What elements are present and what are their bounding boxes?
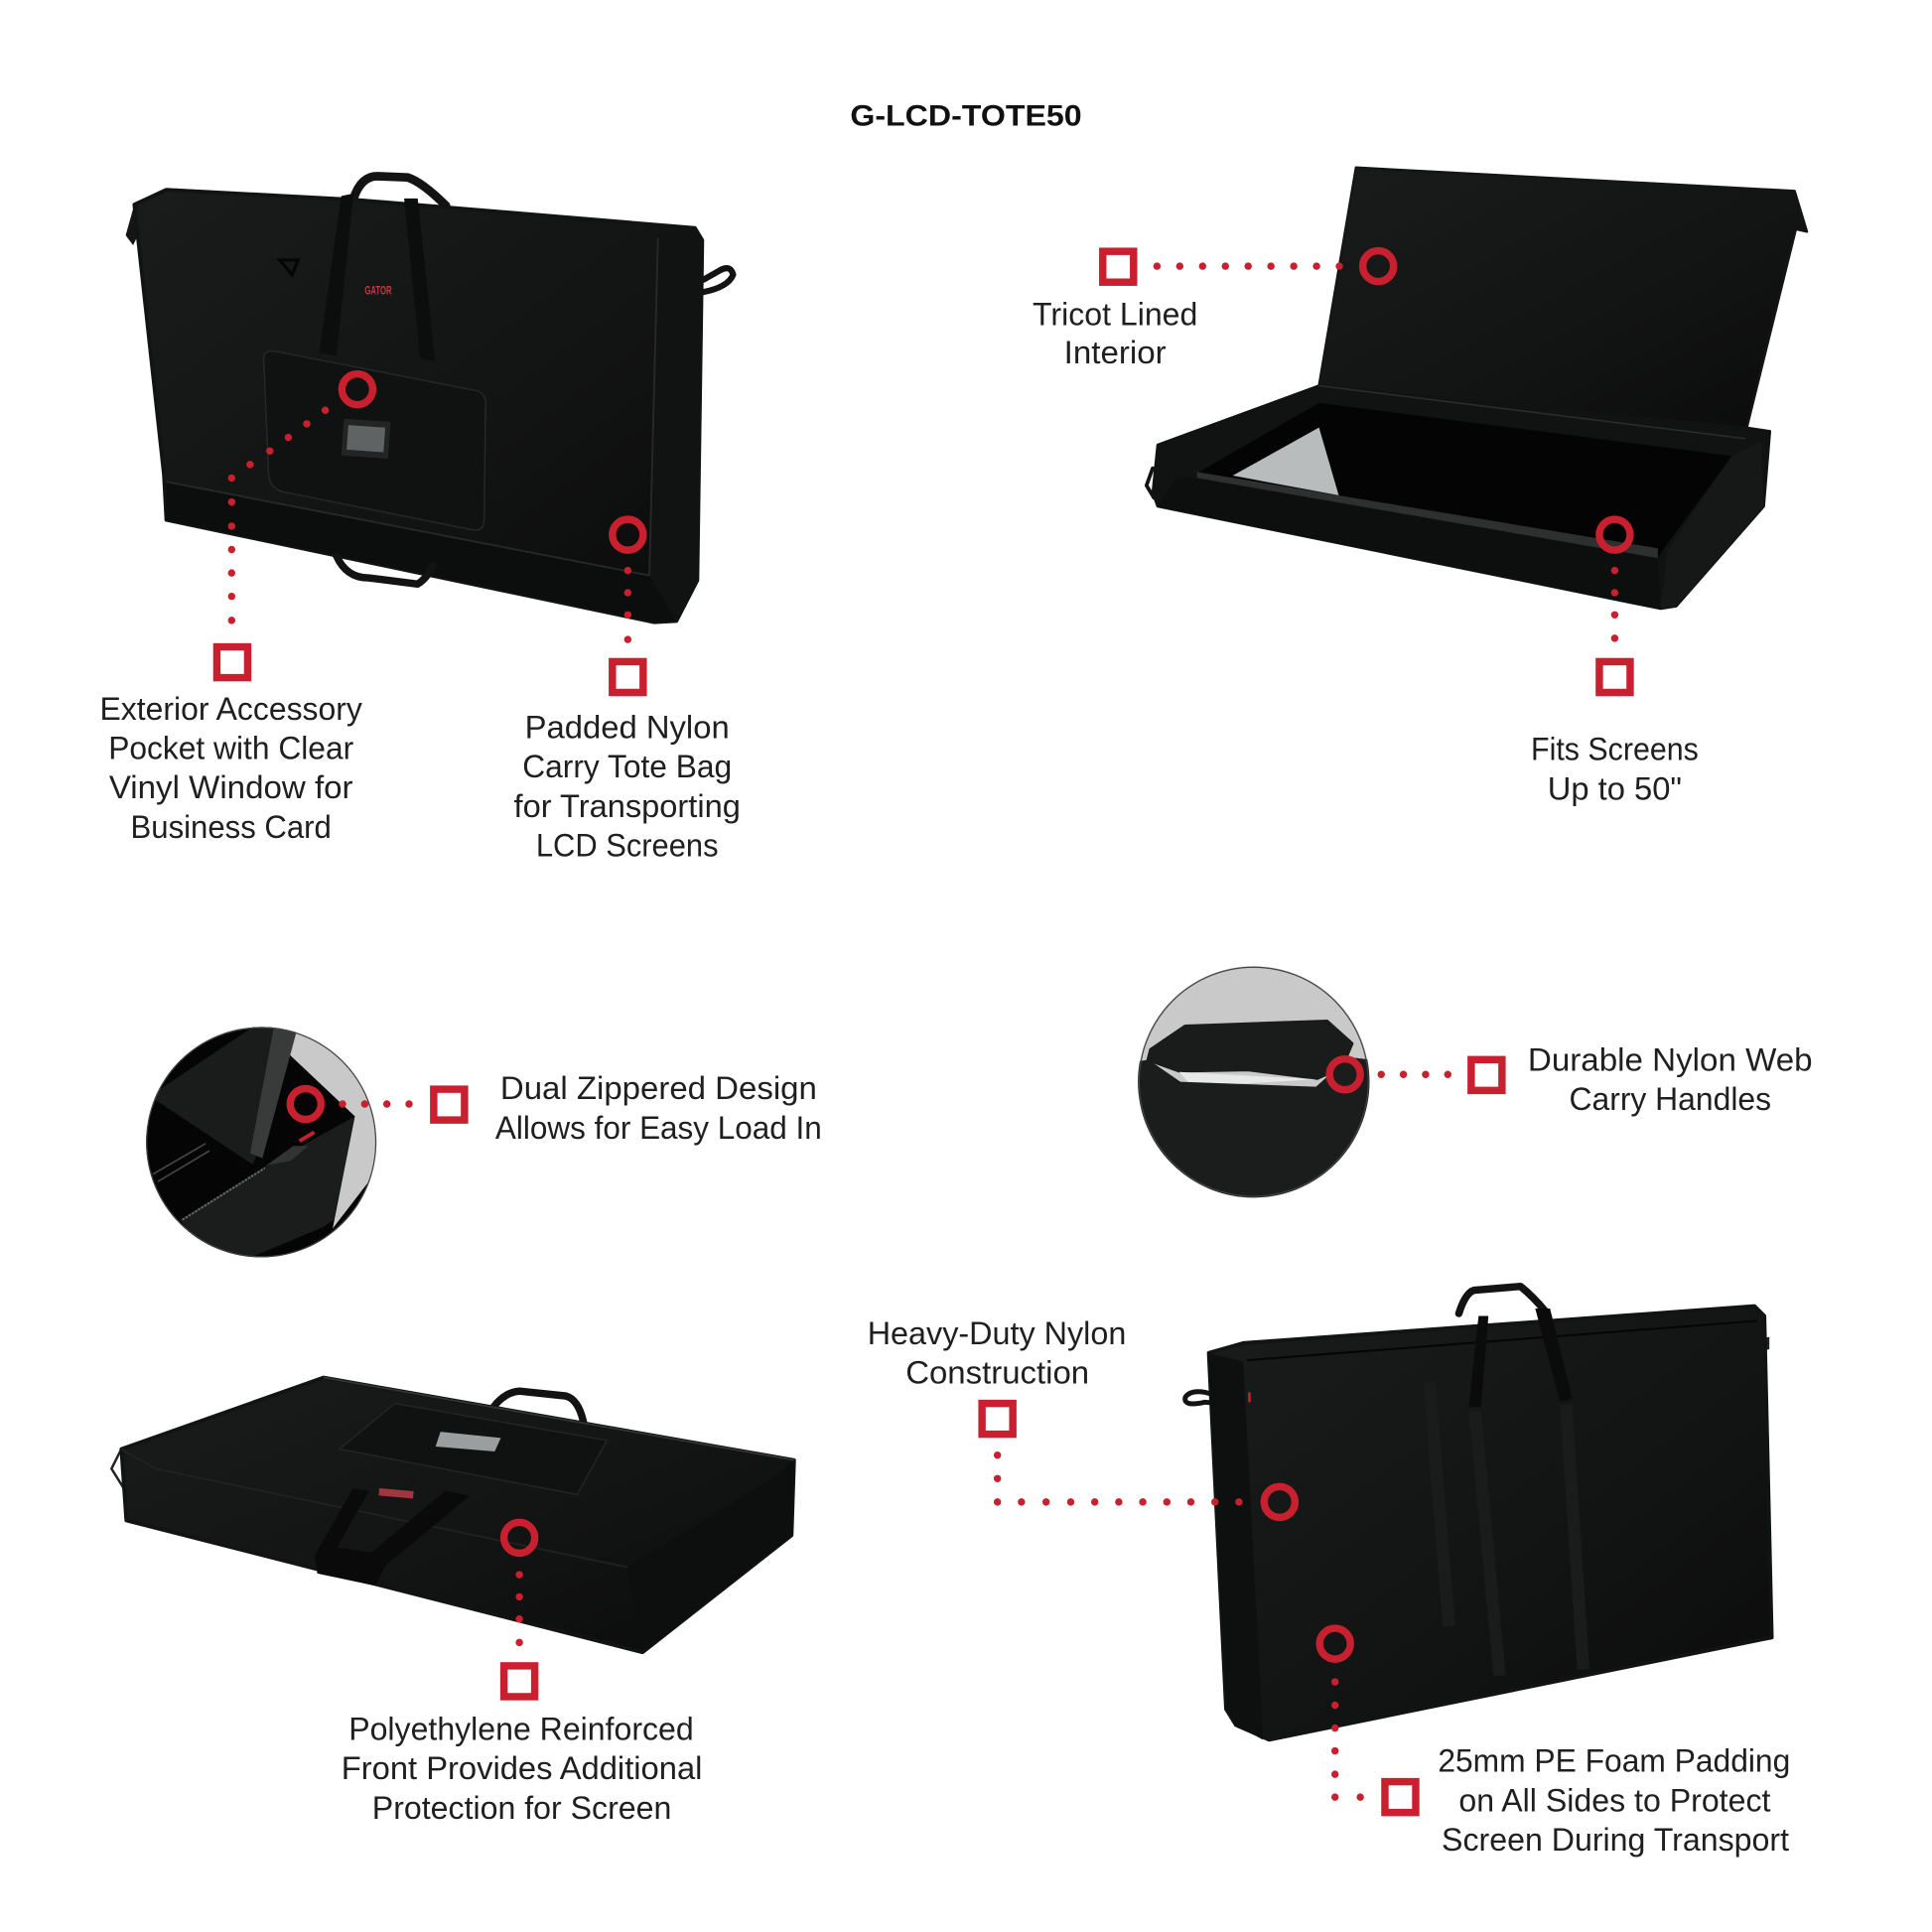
callout: heavy-duty nylon xyxy=(982,1404,1295,1517)
label: carry handles: Durable Nylon Web xyxy=(1528,1041,1813,1077)
callout: tricot lining xyxy=(1103,251,1394,282)
inset: carry handle close-up xyxy=(1134,966,1370,1201)
inset: dual zipper close-up xyxy=(145,1022,382,1262)
label: exterior accessory pocket xyxy=(100,691,363,845)
grey backdrop xyxy=(288,1031,382,1228)
product photo: bag laid flat xyxy=(111,1378,794,1652)
callout: padded nylon bag xyxy=(613,519,643,692)
label: polyethylene front: Front Provides Additional xyxy=(342,1750,702,1786)
label: fits screens: Fits Screens xyxy=(1531,732,1699,767)
label: carry handles: Carry Handles xyxy=(1570,1081,1771,1117)
label: tricot lining xyxy=(1033,297,1197,370)
callout: dual zipper xyxy=(290,1088,465,1120)
label: heavy-duty nylon: Heavy-Duty Nylon xyxy=(868,1315,1126,1351)
callout: fits screens xyxy=(1599,519,1630,692)
flat pocket xyxy=(340,1404,607,1494)
product photo: upright bag, back view xyxy=(1185,1287,1772,1739)
callout: foam padding xyxy=(1319,1628,1416,1813)
label: polyethylene front: Polyethylene Reinforced xyxy=(348,1711,694,1746)
title: G-LCD-TOTE50 xyxy=(850,100,1082,133)
label: exterior accessory pocket: Exterior Accessory xyxy=(100,691,363,727)
ring marker xyxy=(342,374,372,405)
label: dual zipper xyxy=(495,1070,822,1146)
dotted leader xyxy=(228,407,329,624)
label: foam padding xyxy=(1438,1743,1790,1858)
label: exterior accessory pocket: Pocket with Clear xyxy=(108,730,353,765)
bag flap xyxy=(145,1022,296,1165)
label: polyethylene front: Protection for Screen xyxy=(372,1790,671,1826)
label: padded nylon bag xyxy=(514,709,741,864)
handle xyxy=(1149,1022,1351,1078)
label: exterior accessory pocket: Vinyl Window for xyxy=(109,769,353,805)
vinyl window xyxy=(342,419,390,459)
label: heavy-duty nylon xyxy=(868,1315,1126,1391)
label: fits screens xyxy=(1531,732,1699,806)
square marker xyxy=(216,647,247,678)
label: foam padding: on All Sides to Protect xyxy=(1458,1782,1770,1818)
label: fits screens: Up to 50" xyxy=(1548,770,1682,806)
logo xyxy=(362,281,394,301)
label: tricot lining: Interior xyxy=(1064,335,1167,370)
label: dual zipper: Dual Zippered Design xyxy=(500,1070,817,1106)
product photo: upright tote bag, front pocket xyxy=(126,176,733,622)
label: exterior accessory pocket: Business Card xyxy=(131,809,332,845)
label: heavy-duty nylon: Construction xyxy=(905,1355,1089,1391)
label: padded nylon bag: LCD Screens xyxy=(536,828,719,864)
label: foam padding: Screen During Transport xyxy=(1442,1822,1789,1858)
strap handle xyxy=(315,1488,470,1586)
product photo: open bag with screen xyxy=(1147,168,1807,609)
label: padded nylon bag: Padded Nylon xyxy=(525,709,730,745)
pocket xyxy=(264,351,485,530)
label: carry handles xyxy=(1528,1041,1813,1117)
label: tricot lining: Tricot Lined xyxy=(1033,297,1197,333)
label: dual zipper: Allows for Easy Load In xyxy=(495,1110,822,1146)
callout: carry handles xyxy=(1329,1059,1502,1090)
callout: polyethylene front xyxy=(504,1522,535,1697)
label: foam padding: 25mm PE Foam Padding xyxy=(1438,1743,1790,1779)
label: padded nylon bag: for Transporting xyxy=(514,788,741,824)
label: polyethylene front xyxy=(342,1711,702,1826)
logo: GATOR xyxy=(364,284,392,298)
bag body xyxy=(1134,1057,1370,1201)
label: padded nylon bag: Carry Tote Bag xyxy=(522,749,732,784)
screen reflection xyxy=(1233,428,1338,495)
lower panel xyxy=(180,1116,354,1262)
callout: exterior accessory pocket xyxy=(216,374,372,678)
